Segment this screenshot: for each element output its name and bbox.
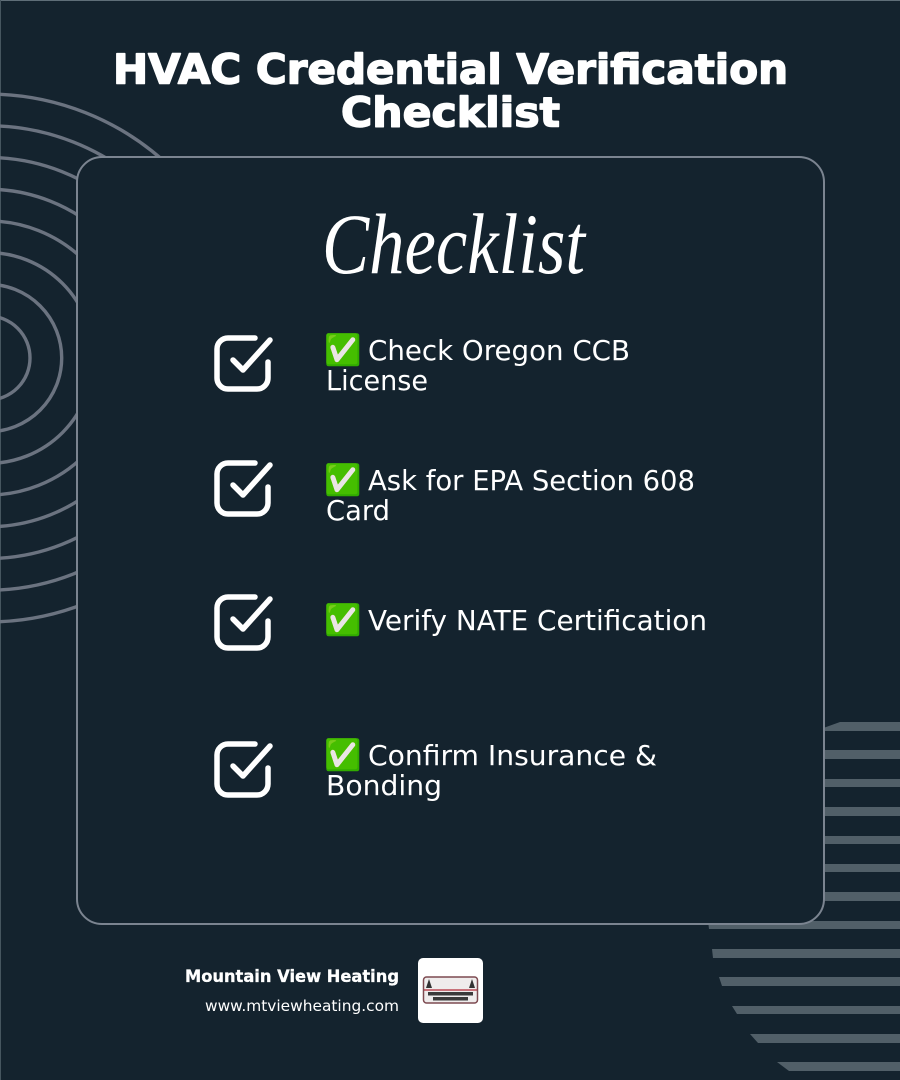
logo — [418, 958, 483, 1023]
checklist item 1: ✅ — [324, 332, 361, 368]
heading: Checklist script: Checklist — [322, 196, 587, 292]
checklist item 2 — [217, 462, 695, 527]
checklist item 4: ✅ — [324, 737, 361, 773]
icon: checkbox 1 — [217, 338, 270, 389]
decorative concentric arcs — [0, 94, 252, 622]
footer brand text: www.mtviewheating.com — [205, 997, 399, 1015]
footer brand text: Mountain View Heating — [185, 967, 399, 986]
decorative stripes — [708, 722, 900, 1071]
checklist item 4: Confirm Insurance & — [368, 739, 657, 772]
checklist item 3: ✅ — [324, 602, 361, 638]
icon: checkbox 2 — [217, 463, 270, 514]
title: HVAC Credential Verification — [113, 46, 788, 94]
icon: checkbox 3 — [217, 597, 270, 648]
title — [113, 46, 788, 136]
checklist item 2: Ask for EPA Section 608 — [368, 464, 695, 497]
checklist item 2: Card — [326, 494, 390, 527]
checklist item 4 — [217, 737, 657, 802]
checklist item 2: ✅ — [324, 462, 361, 498]
checklist item 3 — [217, 597, 707, 648]
checklist item 1 — [217, 332, 630, 397]
checklist item 1: Check Oregon CCB — [368, 334, 630, 367]
checklist item 1: License — [326, 364, 428, 397]
footer brand text — [185, 967, 399, 1015]
title: Checklist — [341, 88, 560, 136]
panel: checklist — [77, 157, 824, 924]
checklist item 3: Verify NATE Certification — [368, 604, 707, 637]
icon: checkbox 4 — [217, 744, 270, 795]
checklist item 4: Bonding — [326, 769, 442, 802]
